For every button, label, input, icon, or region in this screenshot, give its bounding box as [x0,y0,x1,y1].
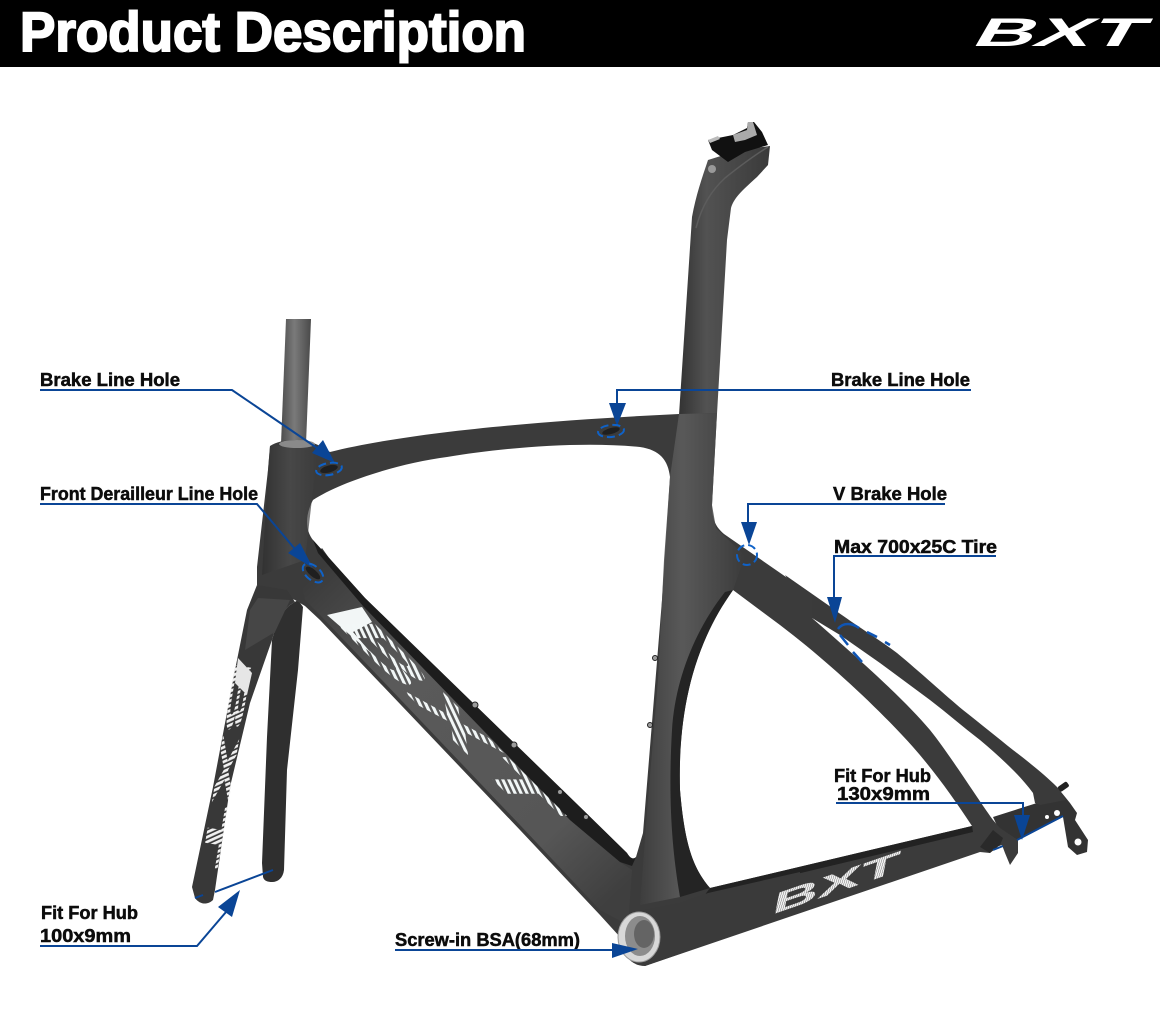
callout: Fit For Hub 100x9mm [40,870,273,946]
leader line [40,390,320,450]
label text: Brake Line Hole [40,370,180,390]
far fork blade [262,600,303,882]
label text: Brake Line Hole [831,370,970,390]
logo slab on down tube [327,607,372,654]
leader line [617,390,971,410]
bicycle frame [192,122,1088,966]
seat tube highlight [640,413,745,905]
fork logo: BXT: BXT [195,657,257,872]
callout: Brake Line Hole, right [597,370,971,438]
label text: Screw-in BSA(68mm) [395,930,580,950]
near dropout inner [980,830,1003,853]
label text: Fit For Hub [834,766,931,786]
crown facet [245,598,290,650]
callout: Max 700x25C Tire [827,537,997,662]
arrowhead [312,440,335,463]
bolt on far dropout [1057,781,1070,792]
label size text: 100x9mm [40,926,131,946]
callout: Front Derailleur Line Hole [40,484,327,586]
brand logo: BXT: BXT [965,11,1158,55]
bottom bracket shell [618,912,660,962]
arrowhead [609,403,626,426]
label size text: 130x9mm [837,784,930,804]
arrowhead [288,543,313,568]
label text: V Brake Hole [833,484,947,504]
dashed tire clearance arcs [838,624,890,662]
far chainstay and dropout [993,787,1088,855]
callout: Screw-in BSA(68mm) [395,930,638,958]
head tube shading [262,446,318,575]
hub width line [993,816,1063,850]
arrowhead [612,943,638,958]
bolts on tubes [472,656,658,820]
dashed marker [299,560,327,586]
seat tube inner shadow [670,590,733,897]
main frame tubes [257,413,1018,966]
down tube logo: BXT: BXT [317,617,579,817]
dashed marker [737,545,757,565]
leader line [40,504,300,555]
arrowhead [218,890,240,917]
cable holes [304,426,620,581]
dropout holes [1045,810,1082,846]
header banner [0,0,1160,67]
callout: V Brake Hole [737,484,947,565]
head cup [279,440,315,448]
seatpost [679,122,770,415]
callout: Fit For Hub 130x9mm [834,766,1063,850]
leader line [395,949,620,951]
steerer tube [281,319,311,444]
chainstay inner shadow [704,826,973,896]
leader line [836,803,1023,820]
leader line [834,556,996,600]
far seat stay [785,575,1066,805]
down tube surface [300,548,632,925]
hub width line [195,870,273,898]
chainstay logo: BXT: BXT [770,845,903,922]
leader line [40,912,226,946]
arrowhead [1014,815,1030,840]
arrowhead [827,597,842,623]
down tube top-edge shadow [313,540,636,866]
label text: Max 700x25C Tire [834,537,997,557]
near fork blade [192,585,295,904]
callout: Brake Line Hole, left [40,370,343,477]
label text: Fit For Hub [41,903,138,923]
leader line [748,504,945,525]
dashed marker [597,424,625,438]
label text: Front Derailleur Line Hole [40,484,258,504]
title: Product Description [20,0,526,63]
arrowhead [741,522,757,545]
bottom bracket junction [630,872,800,966]
fork logo slab [235,658,252,695]
dashed marker [315,461,343,477]
